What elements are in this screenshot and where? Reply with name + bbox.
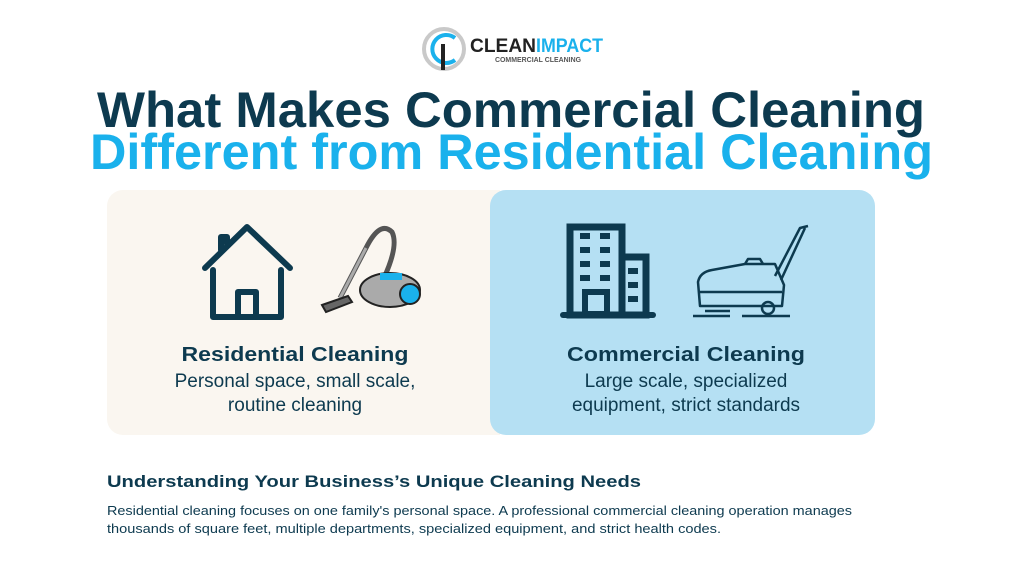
paragraph: thousands of square feet, multiple departments, specialized equipment, and strict health codes. (107, 521, 721, 536)
paragraph (107, 503, 853, 536)
title: Different from Residential Cleaning (90, 124, 933, 180)
icon: building (560, 227, 656, 318)
logo: IMPACT (536, 36, 603, 57)
title (90, 82, 933, 180)
panel: residential (107, 190, 500, 435)
text: commercial description: Large scale, specialized (585, 371, 787, 392)
section heading: Understanding Your Business’s Unique Cleaning Needs (107, 472, 641, 491)
logo (424, 29, 603, 70)
title: What Makes Commercial Cleaning (97, 82, 925, 138)
icon: house (205, 227, 290, 317)
heading: commercial: Commercial Cleaning (567, 344, 805, 366)
text: residential description (175, 371, 415, 416)
panel: commercial (490, 190, 875, 435)
icon: vacuum (322, 228, 420, 312)
logo: CLEAN (470, 36, 536, 57)
text: commercial description (572, 371, 800, 416)
text: residential description: Personal space, small scale, (175, 371, 415, 392)
heading: residential: Residential Cleaning (182, 344, 408, 366)
icon: floor scrubber (693, 226, 808, 316)
text: residential description: routine cleaning (228, 395, 362, 416)
logo: COMMERCIAL CLEANING (495, 57, 582, 64)
paragraph: Residential cleaning focuses on one family's personal space. A professional commercial cleaning operation manages (107, 503, 853, 518)
text: commercial description: equipment, strict standards (572, 395, 800, 416)
